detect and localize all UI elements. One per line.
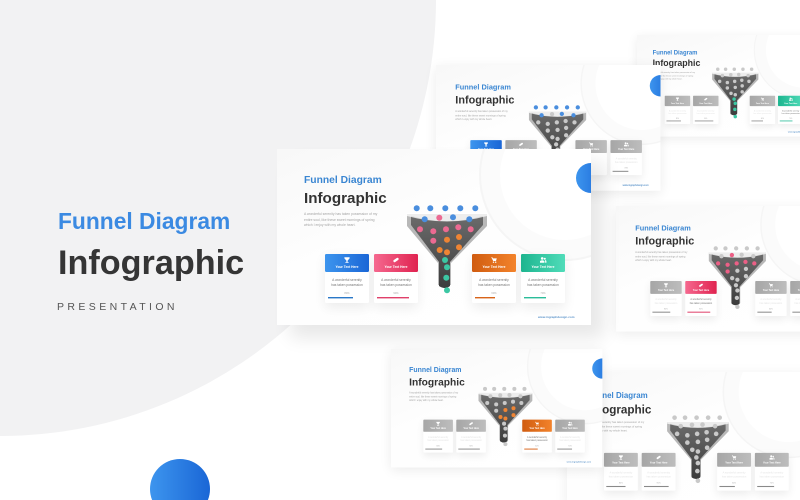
slide: bottom middle, orange highlighted: 70% xyxy=(568,446,572,448)
card: green: A wonderful serenity xyxy=(528,278,558,282)
slide: bottom right, all grey: Your Text Here xyxy=(612,462,630,465)
slide: top middle, blue highlighted xyxy=(435,65,662,195)
slide: bottom right, all grey: has taken possession xyxy=(646,475,671,478)
slide: top middle, blue highlighted: has taken possession xyxy=(615,161,638,164)
slide subtitle: Infographic xyxy=(304,190,387,207)
slide: bottom middle, orange highlighted: has taken possession xyxy=(460,439,483,442)
slide: bottom right, all grey: 80% xyxy=(619,483,623,485)
card: green: has taken possession xyxy=(527,283,559,287)
card: orange: A wonderful serenity xyxy=(479,278,509,282)
card: pink: A wonderful serenity xyxy=(381,278,411,282)
slide: top middle, blue highlighted: A wonderful serenity xyxy=(616,157,638,160)
slide description xyxy=(304,212,378,227)
slide: middle right, pink highlighted: entire soul, like these sweet mornings of spring xyxy=(635,255,686,258)
slide: top middle, blue highlighted: entire soul, like these sweet mornings of spring xyxy=(455,114,506,117)
slide: bottom right, all grey: Your Text Here xyxy=(725,462,743,465)
slide: bottom right, all grey xyxy=(566,372,800,498)
slide: top right, green highlighted: has taken possession xyxy=(753,112,772,115)
slide: bottom middle, orange highlighted: www.ingraphdesign.com xyxy=(567,461,591,464)
slide: bottom right, all grey: has taken possession xyxy=(609,475,634,478)
slide: top middle, blue highlighted: Your Text Here xyxy=(478,148,495,151)
slide: middle right, pink highlighted: has taken possession xyxy=(690,302,713,305)
slide: top right, green highlighted: 60% xyxy=(761,118,765,120)
website footer: www.ingraphdesign.com xyxy=(537,315,575,319)
slide: bottom right, all grey: A wonderful serenity xyxy=(723,472,746,475)
slide: bottom right, all grey: which I enjoy with my whole heart. xyxy=(588,428,628,432)
slide: top right, green highlighted: A wonderful serenity has taken possession of my xyxy=(653,71,695,74)
slide: top right, green highlighted: which I enjoy with my whole heart. xyxy=(653,78,683,81)
slide: top middle, blue highlighted: www.ingraphdesign.com xyxy=(623,185,649,187)
decorative blue circle xyxy=(150,459,210,500)
slide: top middle, blue highlighted: which I enjoy with my whole heart. xyxy=(455,118,492,121)
slide: top right, green highlighted: Your Text Here xyxy=(699,102,712,105)
slide: bottom right, all grey: entire soul, like these sweet mornings of spring xyxy=(588,424,643,428)
slide: middle right, pink highlighted: 90% xyxy=(699,309,703,311)
slide: top middle, blue highlighted: Funnel Diagram xyxy=(455,82,511,91)
slide: top right, green highlighted: Infographic xyxy=(653,58,700,68)
card: pink: 90% xyxy=(393,291,399,295)
slide: middle right, pink highlighted: 80% xyxy=(664,309,668,311)
slide: bottom middle, orange highlighted: A wonderful serenity has taken possession of my xyxy=(409,391,459,394)
slide: middle right, pink highlighted: Your Text Here xyxy=(763,289,780,292)
slide: top right, green highlighted: A wonderful serenity xyxy=(697,109,714,112)
heading: Infographic: Infographic xyxy=(58,244,244,282)
slide: top right, green highlighted: has taken possession xyxy=(782,112,800,115)
slide: bottom middle, orange highlighted: Your Text Here xyxy=(430,427,447,430)
blue corner circle xyxy=(576,163,591,193)
slide: middle right, pink highlighted: 60% xyxy=(769,309,773,311)
card: green xyxy=(521,254,565,303)
slide: middle right, pink highlighted: A wonderful serenity xyxy=(690,298,712,301)
card: orange: Your Text Here xyxy=(483,265,506,269)
slide: top middle, blue highlighted: Your Text Here xyxy=(513,148,530,151)
card: green: Your Text Here xyxy=(532,265,555,269)
card: blue xyxy=(325,254,369,303)
slide: bottom middle, orange highlighted: entire soul, like these sweet mornings of spring xyxy=(409,395,457,398)
slide: bottom middle, orange highlighted: A wonderful serenity xyxy=(428,436,449,439)
slide: bottom right, all grey: A wonderful serenity has taken possession of my xyxy=(588,420,645,424)
slide: bottom middle, orange highlighted: A wonderful serenity xyxy=(527,436,548,439)
slide: middle right, pink highlighted: A wonderful serenity xyxy=(655,298,677,301)
slide: bottom middle, orange highlighted: Your Text Here xyxy=(529,427,546,430)
slide: middle right, pink highlighted: has taken possession xyxy=(760,302,783,305)
slide: bottom middle, orange highlighted: has taken possession xyxy=(427,439,450,442)
slide: top middle, blue highlighted: A wonderful serenity has taken possession of my xyxy=(455,110,508,113)
slide: top middle, blue highlighted: Your Text Here xyxy=(618,148,635,151)
slide: top right, green highlighted: has taken possession xyxy=(697,112,715,115)
funnel with dots xyxy=(407,205,487,293)
left heading block xyxy=(57,208,244,313)
subtitle: presentation: PRESENTATION xyxy=(57,301,178,313)
slide: middle right, pink highlighted: Funnel Diagram xyxy=(635,223,691,232)
slide: bottom right, all grey: Your Text Here xyxy=(763,462,781,465)
slide: bottom middle, orange highlighted: 80% xyxy=(436,446,440,448)
slide: bottom middle, orange highlighted: 90% xyxy=(469,446,473,448)
background: large grey quarter circle xyxy=(0,0,436,436)
card: blue: 80% xyxy=(344,291,350,295)
card: orange: 60% xyxy=(491,291,497,295)
slide: top right, green highlighted xyxy=(636,35,800,140)
slide: bottom middle, orange highlighted xyxy=(390,349,604,471)
slide: main, all colours xyxy=(277,149,607,341)
slide: bottom right, all grey: has taken possession xyxy=(722,475,747,478)
slide: top right, green highlighted: A wonderful serenity xyxy=(669,109,686,112)
slide: bottom right, all grey: A wonderful serenity xyxy=(610,472,633,475)
slide: top middle, blue highlighted: Infographic xyxy=(455,95,514,107)
slide: bottom middle, orange highlighted: has taken possession xyxy=(526,439,548,442)
heading: Funnel Diagram: Funnel Diagram xyxy=(58,208,230,234)
slide: bottom right, all grey: A wonderful serenity xyxy=(760,472,784,475)
slide: top right, green highlighted: has taken possession xyxy=(668,112,687,115)
slide: bottom right, all grey: Infographic xyxy=(588,404,652,417)
slide: top right, green highlighted: 70% xyxy=(789,118,793,120)
slide: middle right, pink highlighted: which I enjoy with my whole heart. xyxy=(635,259,672,262)
slide: middle right, pink highlighted: A wonderful serenity xyxy=(760,298,782,301)
card: pink xyxy=(374,254,418,303)
card: pink: has taken possession xyxy=(380,283,412,287)
slide: top middle, blue highlighted: Your Text Here xyxy=(583,148,600,151)
card: pink: Your Text Here xyxy=(385,265,408,269)
slide: bottom right, all grey: 70% xyxy=(770,483,774,485)
slide description: entire soul, like these sweet mornings of spring xyxy=(304,218,375,222)
slide: top right, green highlighted: entire soul, like these sweet mornings of spring xyxy=(653,75,693,78)
slide description: A wonderful serenity has taken possession of my xyxy=(304,212,378,216)
slide: bottom middle, orange highlighted: which I enjoy with my whole heart. xyxy=(409,399,444,402)
slide: middle right, pink highlighted: Your Text Here xyxy=(693,289,710,292)
slide: bottom middle, orange highlighted: Your Text Here xyxy=(463,427,480,430)
card: blue: A wonderful serenity xyxy=(332,278,362,282)
card: orange xyxy=(472,254,516,303)
card: blue: has taken possession xyxy=(331,283,363,287)
slide: bottom middle, orange highlighted: A wonderful serenity xyxy=(461,436,482,439)
slide: top right, green highlighted: Funnel Diagram xyxy=(653,51,697,57)
slide: top middle, blue highlighted: 70% xyxy=(624,168,628,170)
card: blue: Your Text Here xyxy=(336,265,359,269)
slide: top right, green highlighted: A wonderful serenity xyxy=(754,109,771,112)
slide: middle right, pink highlighted: has taken possession xyxy=(655,302,678,305)
slide: top right, green highlighted: A wonderful serenity xyxy=(782,109,799,112)
slide: middle right, pink highlighted: Your Text Here xyxy=(658,289,675,292)
slide: top right, green highlighted: Your Text Here xyxy=(671,102,684,105)
slide: bottom middle, orange highlighted: Funnel Diagram xyxy=(409,367,461,374)
slide: middle right, pink highlighted xyxy=(616,206,800,335)
slide title: Funnel Diagram xyxy=(304,175,382,186)
slide: bottom right, all grey: A wonderful serenity xyxy=(647,472,671,475)
slide: bottom middle, orange highlighted: Your Text Here xyxy=(562,427,579,430)
slide: bottom middle, orange highlighted: Infographic xyxy=(409,377,465,388)
card: green: 70% xyxy=(540,291,546,295)
slide description: which I enjoy with my whole heart. xyxy=(304,223,356,227)
slide: bottom right, all grey: 90% xyxy=(657,483,661,485)
slide: bottom middle, orange highlighted: 60% xyxy=(535,446,539,448)
slide: top right, green highlighted: Your Text Here xyxy=(784,102,797,105)
slide: top right, green highlighted: Your Text Here xyxy=(756,102,769,105)
slide: top right, green highlighted: 90% xyxy=(704,118,708,120)
slide: middle right, pink highlighted: A wonderful serenity has taken possession of my xyxy=(635,251,688,254)
slide: middle right, pink highlighted: Infographic xyxy=(635,236,694,248)
slide: top right, green highlighted: 80% xyxy=(676,118,680,120)
slide: bottom right, all grey: Funnel Diagram xyxy=(588,391,648,400)
slide: bottom right, all grey: 60% xyxy=(732,483,736,485)
slide: bottom middle, orange highlighted: A wonderful serenity xyxy=(560,436,581,439)
card: orange: has taken possession xyxy=(478,283,510,287)
slide: bottom right, all grey: Your Text Here xyxy=(650,462,668,465)
slide: bottom right, all grey: has taken possession xyxy=(760,475,785,478)
slide: bottom middle, orange highlighted: has taken possession xyxy=(559,439,581,442)
